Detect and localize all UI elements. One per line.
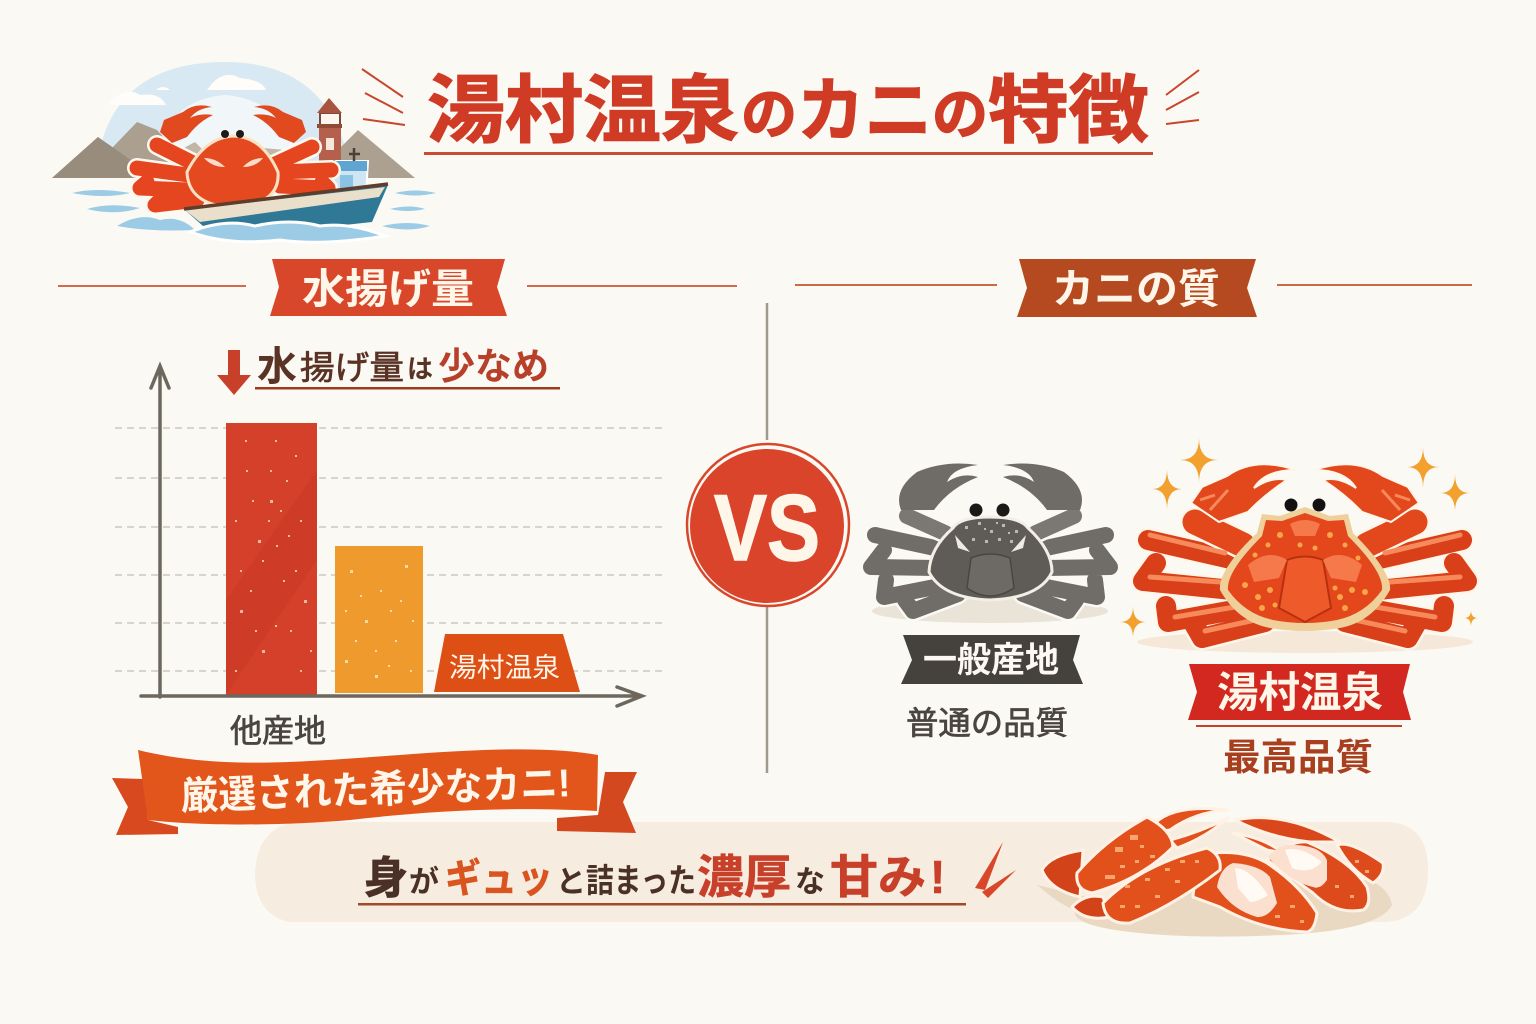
label: 湯村温泉 (1188, 664, 1411, 727)
ribbon: 厳選された希少なカニ (112, 749, 637, 835)
band: sweetness message: 甘み (830, 851, 926, 903)
illustration: top-quality red crab with sparkles (1120, 438, 1478, 653)
text: 普通の品質: 普通の品質 (906, 705, 1068, 741)
text: 最高品質: 最高品質 (1223, 737, 1373, 778)
title: の (741, 83, 797, 146)
callout: 水揚げ量は少なめ (217, 345, 560, 395)
title: の (932, 83, 988, 146)
VS badge: VS (714, 475, 820, 580)
axis label: 他産地 (230, 713, 326, 749)
band: sweetness message: な (795, 866, 825, 899)
heading: 水揚げ量: 水揚げ量 (302, 266, 474, 312)
right limbs (1314, 464, 1467, 638)
callout: 水揚げ量は少なめ: 少なめ (438, 346, 549, 387)
band: sweetness message: と (556, 866, 586, 899)
bar: 湯村温泉: 湯村温泉 (449, 653, 560, 683)
icon: crab on fishing boat (52, 62, 436, 242)
label: 一般産地: 一般産地 (923, 641, 1059, 680)
bar: other region 2 (335, 546, 423, 693)
callout: 水揚げ量は少なめ: は (407, 354, 433, 384)
band: sweetness message: が (409, 865, 439, 899)
heading: 水揚げ量 (58, 259, 737, 316)
bar: other region 1 (226, 423, 317, 695)
left limbs (1143, 464, 1296, 638)
body (1220, 507, 1390, 631)
band: sweetness message: 身 (364, 854, 408, 903)
heading: カニの質: カニの質 (1052, 266, 1220, 312)
callout: 水揚げ量は少なめ: 水 (257, 345, 297, 389)
title: 湯村温泉 (427, 69, 739, 152)
title: カニ (797, 72, 932, 150)
chart: landing volume (115, 366, 662, 749)
bar: 湯村温泉 (434, 634, 580, 692)
band: sweetness message: ! (930, 851, 945, 903)
band: sweetness message: 濃厚 (697, 851, 791, 903)
divider (766, 303, 768, 773)
band: sweetness message (255, 822, 1428, 922)
ribbon: 厳選された希少なカニ: 厳選された希少なカニ! (180, 762, 571, 819)
label: 一般産地 (901, 635, 1083, 684)
band: sweetness message: ギュッ (445, 857, 553, 901)
title: 特徴 (988, 69, 1149, 152)
sub: crab (137, 105, 331, 205)
sparkles (1120, 438, 1478, 638)
illustration: crab legs pile (1037, 809, 1392, 937)
sub: boat (184, 184, 388, 242)
label: 湯村温泉: 湯村温泉 (1217, 669, 1383, 716)
axes (141, 366, 642, 706)
VS badge (687, 444, 849, 606)
callout: 水揚げ量は少なめ: 揚げ量 (300, 349, 404, 386)
band: sweetness message: 詰まった (586, 862, 696, 899)
illustration: ordinary grey crab (871, 464, 1110, 623)
heading: カニの質 (795, 259, 1472, 317)
title (362, 69, 1199, 155)
